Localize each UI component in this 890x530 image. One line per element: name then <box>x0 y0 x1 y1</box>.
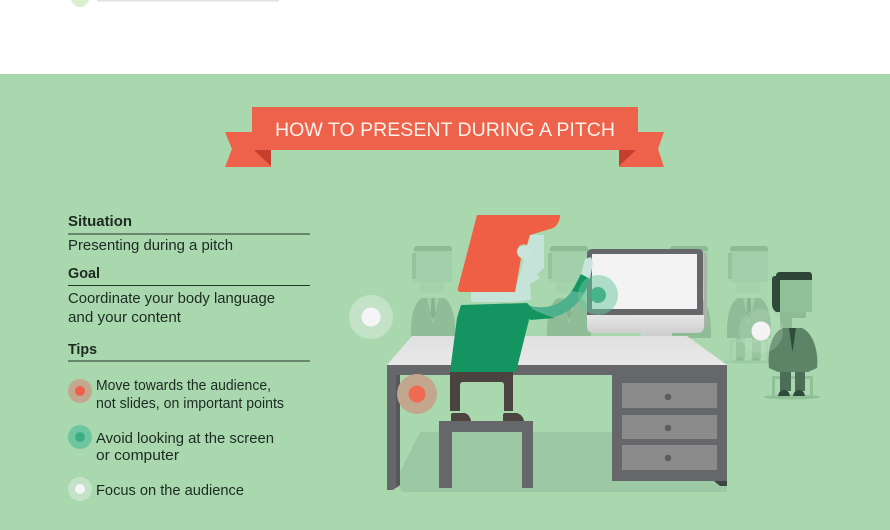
tip: move towards the audience: Move towards the audience, <box>96 378 271 394</box>
cropped previous section: bullet and text line <box>71 0 279 7</box>
presenter hair <box>458 215 560 292</box>
tip: move towards the audience: not slides, on important points <box>96 396 284 412</box>
tip: avoid looking at the screen: Avoid looking at the screen <box>96 431 274 447</box>
floor shadow <box>396 432 727 492</box>
text block: goal: and your content <box>68 310 181 326</box>
audience in background <box>411 246 778 364</box>
tip: move towards the audience <box>68 378 284 412</box>
presenter arm <box>530 274 590 318</box>
text block: goal <box>68 266 310 326</box>
presenter neck and face <box>471 235 544 302</box>
stool <box>439 421 533 488</box>
marker: white dot right <box>739 309 783 353</box>
title banner <box>225 107 664 167</box>
marker: red dot <box>397 374 437 414</box>
computer monitor <box>587 249 707 348</box>
text block: situation <box>68 214 310 254</box>
presenter hand <box>581 257 593 279</box>
presenter torso <box>450 303 532 372</box>
presenter legs and shoes <box>450 372 513 411</box>
text block: tips <box>68 342 310 501</box>
marker: green dot <box>578 275 618 315</box>
text block: tips: Tips <box>68 342 97 358</box>
text block: goal: Goal <box>68 266 100 282</box>
desk drawers <box>612 365 727 486</box>
presenter <box>450 215 593 421</box>
tip: focus on the audience <box>68 477 244 501</box>
title: HOW TO PRESENT DURING A PITCH <box>275 119 615 141</box>
front audience member <box>764 272 820 400</box>
tip: avoid looking at the screen: or computer <box>96 448 179 464</box>
desk <box>387 336 727 490</box>
right ghost legs and chair <box>722 338 778 364</box>
tip: focus on the audience: Focus on the audience <box>96 483 244 499</box>
marker: white dot left <box>349 295 393 339</box>
text block: situation: Presenting during a pitch <box>68 238 233 254</box>
tip: avoid looking at the screen <box>68 425 274 464</box>
text block: goal: Coordinate your body language <box>68 291 275 307</box>
text block: situation: Situation <box>68 214 132 230</box>
